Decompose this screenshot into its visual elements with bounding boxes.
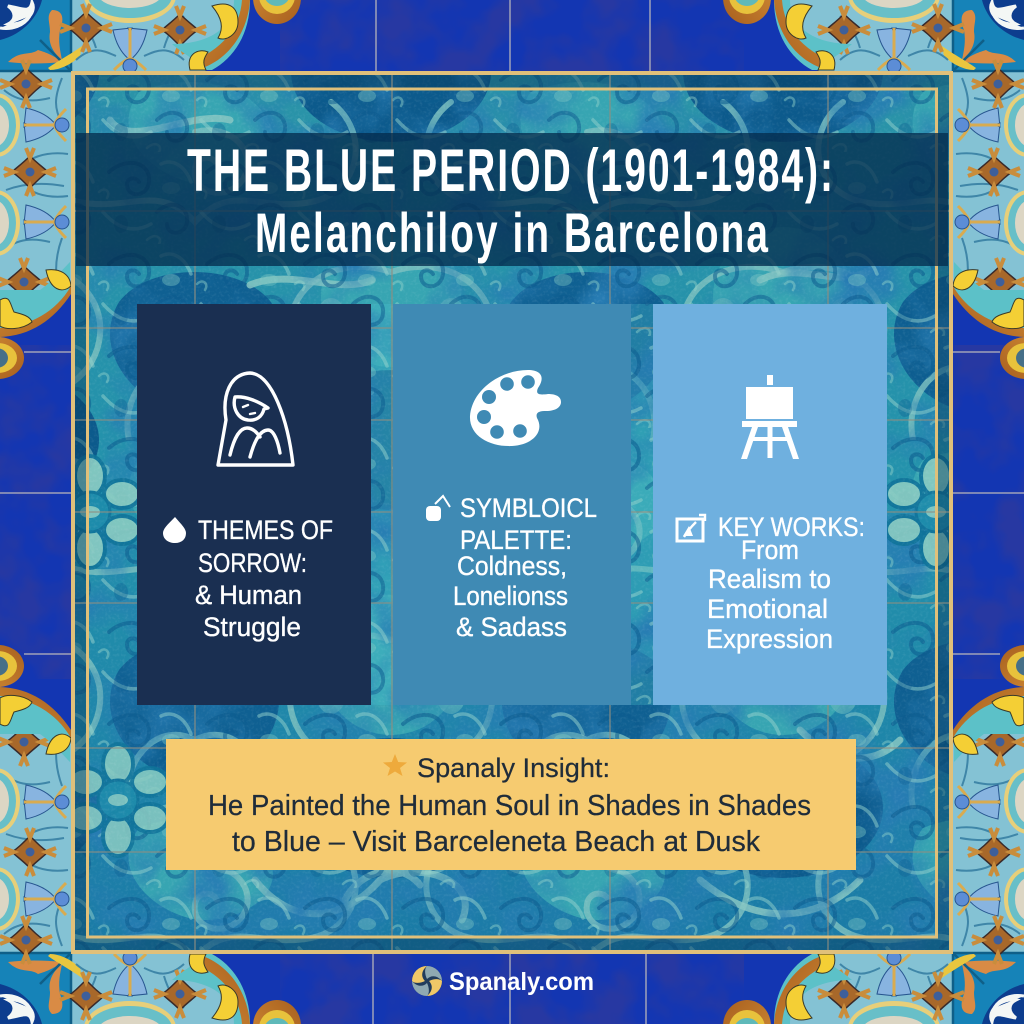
ornate corner tiles: top right (723, 0, 1024, 379)
callout text: Spanaly Insight: (417, 753, 610, 783)
panel text: Expression (706, 624, 833, 654)
icon: paint palette (470, 370, 561, 446)
panel: themes of sorrow (137, 304, 371, 705)
panel text: SYMBLOICL (460, 493, 597, 523)
panel: symbolic palette (393, 304, 631, 705)
gold frame (73, 73, 951, 952)
callout text: to Blue – Visit Barceleneta Beach at Dusk (232, 826, 760, 858)
panel text: Emotional (707, 594, 828, 624)
panel text (706, 512, 865, 654)
panel text: Realism to (708, 564, 831, 594)
icon: star (383, 754, 407, 776)
panel text: From (741, 535, 799, 565)
panel text: PALETTE: (460, 525, 572, 555)
panel text: KEY WORKS: (718, 512, 865, 542)
icon: small paint pot (426, 496, 450, 521)
website text: Spanaly.com (449, 968, 594, 996)
panel text: & Sadass (456, 612, 567, 642)
footer brand (412, 966, 594, 996)
callout text (208, 753, 811, 858)
panel text (453, 493, 597, 642)
title line 2: Melanchiloy in Barcelona (255, 201, 770, 264)
panel text: Coldness, (457, 551, 567, 581)
ornate corner tiles: bottom left (0, 645, 301, 1024)
icon: spanaly logo (412, 966, 442, 996)
title banner (76, 133, 948, 266)
callout text: He Painted the Human Soul in Shades in Shades (208, 790, 811, 822)
icon: easel (741, 375, 799, 459)
ornate corner tiles: bottom right (723, 645, 1024, 1024)
callout: insight (166, 739, 856, 870)
icon: tear drop (163, 517, 186, 543)
panel text: Lonelionss (453, 581, 568, 611)
panel text: & Human (195, 580, 302, 610)
icon: grieving figure (218, 373, 293, 465)
panel: key works (653, 304, 887, 705)
ornate corner tiles: top left (0, 0, 301, 379)
icon: framed picture (677, 515, 705, 541)
panel text: SORROW: (198, 548, 307, 578)
panel text: Struggle (203, 612, 301, 642)
teal patterned tile field (40, 72, 986, 952)
panel text: THEMES OF (198, 515, 333, 545)
panel text (195, 515, 333, 642)
